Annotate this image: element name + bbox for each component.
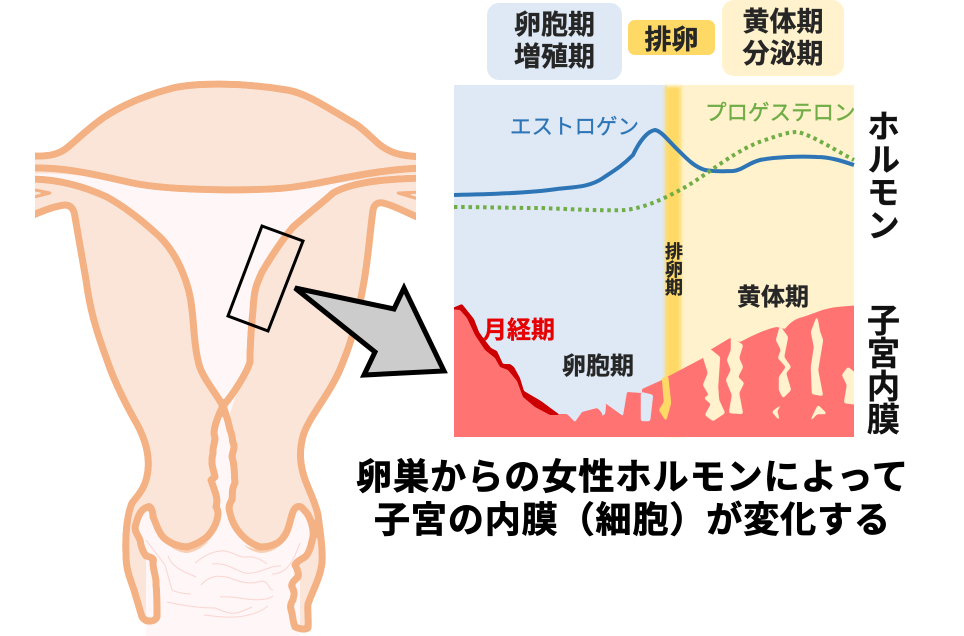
endocervical shading [169,518,298,553]
phase box: luteal: 黄体期 [742,7,824,37]
caption [356,456,908,540]
caption: 卵巣からの女性ホルモンによって [356,456,908,497]
progesterone curve [454,132,854,210]
uterine cavity and canal [30,174,420,636]
luteal background [680,85,854,437]
phase box: follicular: 増殖期 [514,42,595,72]
phase box: follicular [487,3,622,80]
arrow [295,288,444,375]
caption: 子宮の内膜（細胞）が変化する [374,499,890,540]
illustration: uterus cross-section [28,84,422,636]
estrogen curve [454,130,854,195]
label: ovulation period: 排卵期 [663,242,683,297]
heading: endometrium: 子宮内膜 [862,303,900,435]
phase box: ovulation [628,20,715,55]
ovulation band [665,86,681,436]
phase box: luteal: 分泌期 [742,39,824,69]
phase box: luteal [722,0,844,76]
gland gaps [598,318,854,422]
uterus muscle fill [30,84,420,628]
label: progesterone: プロゲステロン [705,101,856,125]
label: estrogen: エストロゲン [510,115,639,139]
vaginal wrinkles [146,540,300,617]
uterus outlines [28,84,422,629]
endometrium [454,304,854,437]
menstrual shedding layer [450,304,560,415]
heading: hormone: ホルモン [862,109,900,241]
label: menstrual phase: 月経期 [483,317,555,344]
panel: phase chart [440,85,870,450]
phase box: ovulation: 排卵 [644,25,698,55]
callout: magnified region box [228,226,303,331]
label: follicular phase: 卵胞期 [562,353,634,380]
label: luteal phase: 黄体期 [737,284,809,311]
phase box: follicular: 卵胞期 [514,10,595,40]
follicular background [454,85,667,437]
